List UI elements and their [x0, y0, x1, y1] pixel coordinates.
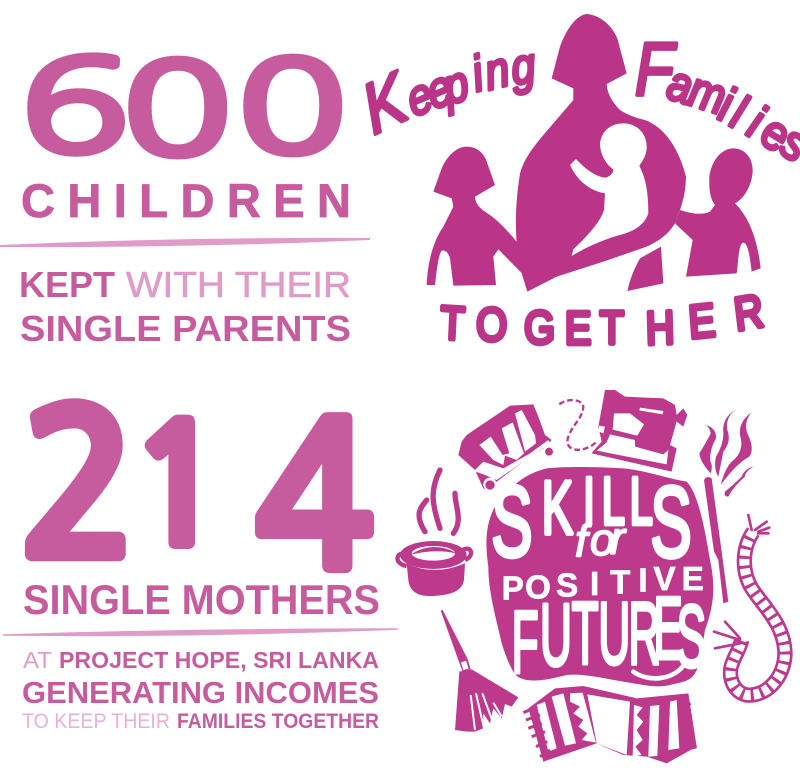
text: kept with their single parents: SINGLE PARENTS [20, 308, 351, 349]
title: Families: F [635, 27, 677, 111]
icon: rickshaw [458, 404, 553, 491]
panel: 600 children stat [0, 42, 370, 349]
icon: stick [704, 477, 728, 603]
icon: stitched thread [559, 400, 597, 450]
figure: right child [675, 148, 761, 277]
word: for: for [575, 512, 627, 567]
text: at project hope, sri lanka: PROJECT HOPE, SRI LANKA [59, 647, 379, 673]
heading: children: CHILDREN [21, 174, 351, 227]
title: Keeping: K [353, 57, 418, 150]
big number 214: 4 [254, 400, 375, 598]
word: skills: L [602, 464, 625, 538]
icon: broom [441, 610, 518, 732]
central blob [486, 467, 713, 686]
icon: cooking pot [397, 470, 471, 596]
icon: striped scarf [714, 515, 785, 695]
icon: patterned mat [523, 686, 697, 763]
panel: 214 single mothers stat [3, 388, 398, 733]
figure: small shape [627, 247, 663, 291]
word: skills: S [491, 466, 533, 578]
panel: skills for positive futures illustration [397, 390, 785, 763]
big number 600: 600 [20, 42, 347, 174]
text: generating incomes: GENERATING INCOMES [22, 675, 379, 710]
figure: mother [516, 14, 686, 292]
big number 214: 2 [18, 388, 139, 586]
text: kept with their single parents [19, 264, 351, 349]
panel: keeping families together logo [353, 14, 800, 355]
steam [419, 470, 458, 533]
icon: sewing machine [592, 390, 687, 472]
figure: left child [427, 147, 522, 286]
heading: single mothers: SINGLE MOTHERS [23, 576, 380, 623]
big number 214: 1 [128, 405, 228, 569]
flourish under futures [633, 663, 685, 678]
lettering: skills for positive futures [491, 464, 706, 692]
icon: flames [699, 410, 753, 497]
word: skills: L [630, 464, 653, 538]
word: skills: K [542, 467, 573, 550]
figure: baby [570, 123, 648, 256]
word: futures: FUTURES [512, 579, 706, 692]
text: to keep their families together: TO KEEP THEIR [22, 709, 170, 733]
word: skills: S [650, 467, 692, 578]
title: Together: TOGETHER [439, 285, 766, 355]
text: kept with their single parents: WITH THEIR [126, 264, 351, 305]
title: Keeping: eeping [400, 36, 538, 127]
text: to keep their families together [22, 709, 379, 733]
word: positive: POSITIVE [502, 561, 704, 607]
text: to keep their families together: FAMILIES TOGETHER [177, 709, 379, 733]
divider line [3, 629, 398, 635]
text: kept with their single parents: KEPT [19, 264, 115, 305]
text: at project hope, sri lanka: AT [23, 647, 52, 673]
divider line [0, 239, 370, 246]
word: skills: I [583, 464, 595, 538]
